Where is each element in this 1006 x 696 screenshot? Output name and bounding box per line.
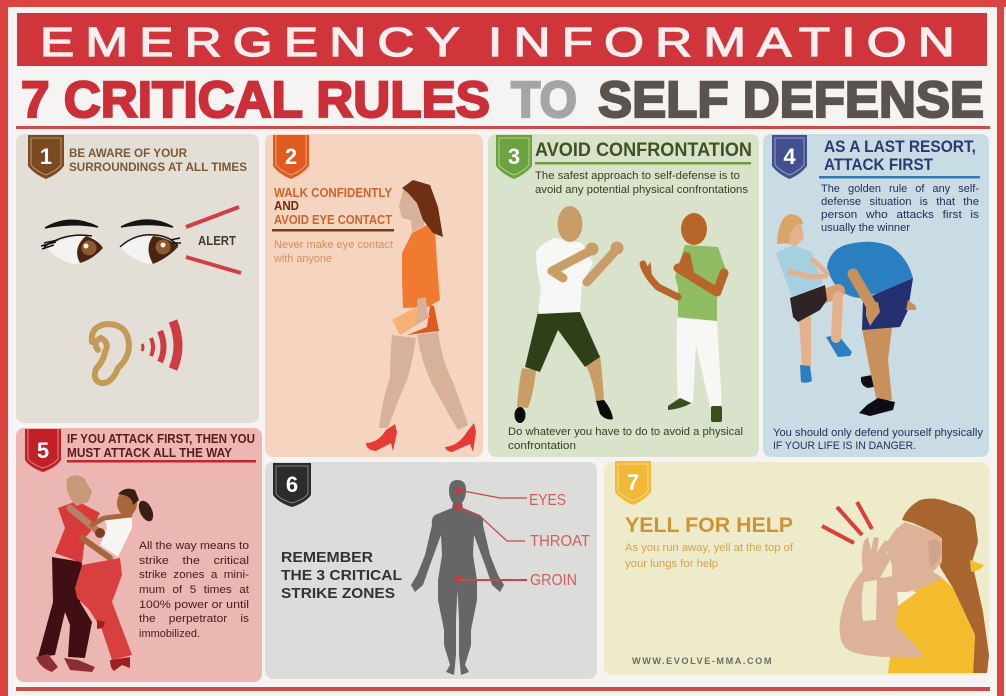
badge 4 [772, 135, 807, 179]
zone labels [529, 492, 590, 589]
panel 3: avoid confrontation [488, 134, 759, 457]
zone labels: EYES [529, 492, 566, 509]
intro text 4: usually the winner [821, 222, 910, 234]
closing text 3: Do whatever you have to do to avoid a physical [508, 426, 743, 438]
body text 7 [625, 542, 794, 570]
leader lines [458, 490, 527, 580]
body text 5: All the way means to [139, 540, 249, 552]
heading 5: MUST ATTACK ALL THE WAY [67, 446, 233, 460]
heading 1: BE AWARE OF YOUR [69, 146, 187, 160]
intro text 4 [821, 183, 980, 234]
heading 4: AS A LAST RESORT, [824, 137, 976, 156]
intro text 4: defense situation is that the [821, 196, 979, 208]
body text 5: mum of 5 times at [139, 584, 249, 596]
heading 6 [281, 549, 402, 602]
heading 6: REMEMBER [281, 549, 373, 566]
zone labels: THROAT [530, 533, 590, 550]
panel 6: strike zones [265, 462, 597, 679]
heading 2: AVOID EYE CONTACT [274, 213, 392, 227]
body text 2: with anyone [273, 253, 332, 265]
heading 7: YELL FOR HELP [625, 513, 793, 537]
badge 7 [615, 461, 651, 505]
badge 2 [273, 135, 309, 179]
intro text 4: person who attacks first is [821, 209, 980, 221]
badge 3 [496, 135, 532, 179]
icon: shout lines [822, 502, 872, 543]
figure: man with raised fists [514, 206, 624, 423]
heading 6: STRIKE ZONES [281, 585, 395, 602]
body text 7: As you run away, yell at the top of [625, 542, 794, 554]
body text 5: strike zones a mini- [139, 569, 249, 581]
badge 3: 3 [508, 144, 520, 169]
figure: human body [411, 480, 504, 675]
icon: alert lines [186, 207, 241, 273]
panel 7: yell for help [604, 461, 989, 675]
zone labels: GROIN [530, 572, 577, 589]
heading 3: AVOID CONFRONTATION [535, 140, 752, 161]
panel 4: attack first [763, 134, 989, 457]
intro text 3 [535, 170, 749, 196]
intro text 3: The safest approach to self-defense is to [535, 170, 740, 182]
intro text 4: The golden rule of any self- [821, 183, 979, 195]
figure: man with open hands [641, 213, 727, 422]
badge 4: 4 [783, 144, 796, 169]
panel 1: awareness [16, 134, 259, 423]
subtitle: TO [511, 71, 577, 128]
subtitle [21, 71, 984, 128]
body text 2 [273, 239, 393, 265]
closing text 3: confrontation [508, 440, 576, 452]
figure: two fighters [36, 475, 156, 672]
figure: walking woman [366, 180, 476, 452]
badge 5: 5 [37, 438, 49, 463]
figure: woman kneeing [776, 214, 852, 383]
heading 4: ATTACK FIRST [824, 155, 934, 174]
heading 2: AND [274, 199, 299, 213]
website: WWW.EVOLVE-MMA.COM [632, 656, 773, 666]
closing text 4: IF YOUR LIFE IS IN DANGER. [773, 440, 916, 452]
body text 5: the perpetrator is [139, 613, 250, 625]
intro text 3: avoid any potential physical confrontations [535, 184, 749, 196]
figure: man bent over [827, 242, 916, 416]
subtitle: SELF DEFENSE [598, 71, 984, 128]
badge 6: 6 [286, 472, 298, 497]
title banner [17, 13, 987, 66]
closing text 4 [773, 427, 983, 452]
heading 5: IF YOU ATTACK FIRST, THEN YOU [67, 432, 255, 446]
body text 5 [139, 540, 250, 640]
heading 2 [274, 186, 393, 227]
closing text 4: You should only defend yourself physically [773, 427, 983, 439]
badge 1 [28, 135, 64, 179]
badge 6 [273, 463, 311, 507]
heading 1: SURROUNDINGS AT ALL TIMES [69, 160, 247, 174]
heading 1 [69, 146, 247, 174]
badge 5 [25, 429, 61, 472]
body text 2: Never make eye contact [274, 239, 393, 251]
badge 2: 2 [285, 144, 297, 169]
panel 5: attack all the way [16, 428, 262, 682]
body text 5: immobilized. [139, 628, 200, 640]
icon: sound waves [142, 321, 178, 369]
heading 2: WALK CONFIDENTLY [274, 186, 393, 200]
badge 1: 1 [40, 144, 52, 169]
body text 5: 100% power or until [139, 599, 249, 611]
subtitle: 7 CRITICAL RULES [21, 71, 490, 128]
icon: ear [92, 324, 129, 383]
closing text 3 [508, 426, 743, 452]
alert label: ALERT [198, 234, 236, 248]
strike zone markers [454, 487, 462, 582]
body text 7: your lungs for help [625, 558, 718, 570]
icon: eyes [41, 220, 181, 264]
heading 6: THE 3 CRITICAL [281, 567, 402, 584]
figure: yelling woman [840, 499, 989, 673]
badge 7: 7 [627, 470, 639, 495]
panel 2: walk confidently [265, 134, 483, 457]
body text 5: strike the critical [139, 555, 249, 567]
title banner: EMERGENCY INFORMATION [40, 19, 966, 65]
heading 5 [67, 432, 255, 460]
heading 4 [824, 137, 976, 174]
